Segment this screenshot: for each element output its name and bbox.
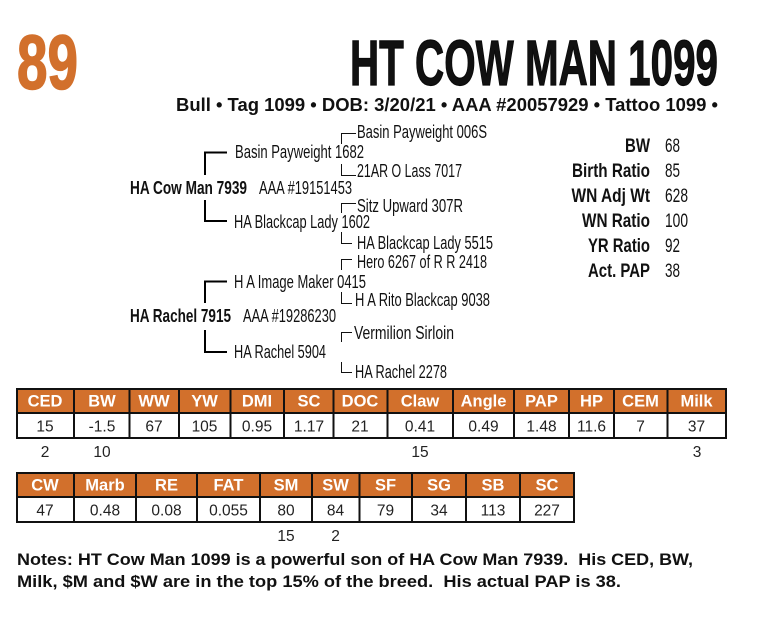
table 1 percentile ranks: 10 xyxy=(93,444,111,461)
table 1 values: 0.41 xyxy=(405,418,435,436)
table 2 values xyxy=(36,502,560,520)
table 1 headers: Milk xyxy=(680,392,713,410)
table 2 values: 47 xyxy=(36,502,54,520)
table 2 values: 0.055 xyxy=(209,502,248,520)
table 1 headers: YW xyxy=(191,392,218,410)
table 1 values: 37 xyxy=(688,418,705,436)
table 2 headers: RE xyxy=(155,476,178,494)
table 2 percentile ranks: 15 xyxy=(277,528,295,545)
table 2 values: 80 xyxy=(277,502,295,520)
sire side of pedigree: HA Blackcap Lady 5515 xyxy=(357,233,493,253)
table 1 values: 1.48 xyxy=(526,418,557,436)
table 2 percentile ranks xyxy=(277,528,340,545)
sire side of pedigree: AAA #19151453 xyxy=(259,178,352,198)
table 2 headers xyxy=(31,476,559,494)
table 1 headers: SC xyxy=(298,392,321,410)
table 1 percentile ranks: 2 xyxy=(41,444,49,461)
table 2 values: 34 xyxy=(430,502,448,520)
table 2 headers: SW xyxy=(322,476,349,494)
table 1 percentile ranks: 3 xyxy=(693,444,701,461)
pedigree connector lines xyxy=(205,134,356,372)
notes: Notes: HT Cow Man 1099 is a powerful son of HA Cow Man 7939. His CED, BW, xyxy=(17,550,693,569)
table 2 headers: FAT xyxy=(214,476,243,494)
dam side of pedigree: HA Rachel 7915 xyxy=(130,306,231,326)
dam side of pedigree: HA Rachel 2278 xyxy=(355,362,447,382)
dam side of pedigree xyxy=(130,252,490,382)
table 2 values: 227 xyxy=(534,502,560,520)
table 1 values xyxy=(36,418,705,436)
table 2 values: 113 xyxy=(481,502,505,520)
table 1 values: 7 xyxy=(636,418,645,436)
sire side of pedigree: HA Cow Man 7939 xyxy=(130,178,247,198)
table 1 headers: Claw xyxy=(401,392,439,410)
table 1 headers: CED xyxy=(28,392,62,410)
performance stats: WN Adj Wt xyxy=(572,186,651,207)
table 2 headers: SB xyxy=(482,476,505,494)
table 1 values: 21 xyxy=(351,418,369,436)
table 1 values: 15 xyxy=(36,418,54,436)
sire side of pedigree: HA Blackcap Lady 1602 xyxy=(234,212,370,232)
table 1 headers: DOC xyxy=(342,392,378,410)
performance stats: YR Ratio xyxy=(588,236,650,257)
performance stats: Birth Ratio xyxy=(572,161,650,182)
table 1 headers: PAP xyxy=(525,392,558,410)
table 2 values: 84 xyxy=(327,502,344,520)
performance stats: 38 xyxy=(665,261,680,282)
table 2 headers: SC xyxy=(536,476,559,494)
sire side of pedigree: Basin Payweight 1682 xyxy=(235,142,364,162)
performance stats xyxy=(572,136,688,282)
table 1 values: 0.49 xyxy=(468,418,499,436)
sire side of pedigree: 21AR O Lass 7017 xyxy=(357,161,462,181)
table 1 headers xyxy=(28,392,713,410)
table 1 headers: HP xyxy=(580,392,603,410)
EPD table 2 xyxy=(16,472,574,522)
subtitle: registration details: Bull • Tag 1099 • DOB: 3/20/21 • AAA #20057929 • Tattoo 1099 • xyxy=(176,95,718,115)
table 1 headers: WW xyxy=(138,392,170,410)
table 2 percentile ranks: 2 xyxy=(331,528,340,545)
dam side of pedigree: Hero 6267 of R R 2418 xyxy=(357,252,487,272)
sire side of pedigree: Sitz Upward 307R xyxy=(357,196,463,216)
performance stats: 68 xyxy=(665,136,680,157)
table 2 headers: Marb xyxy=(85,476,125,494)
pedigree xyxy=(130,122,493,382)
lot number: 89 xyxy=(17,20,78,106)
performance stats: 100 xyxy=(665,211,688,232)
table 2 values: 79 xyxy=(377,502,394,520)
EPD table 1 xyxy=(16,388,727,438)
sire side of pedigree xyxy=(130,122,493,253)
table 1 headers: CEM xyxy=(622,392,659,410)
table 2 headers: SG xyxy=(427,476,451,494)
performance stats: 92 xyxy=(665,236,680,257)
table 1 values: 67 xyxy=(145,418,163,436)
performance stats: Act. PAP xyxy=(588,261,650,282)
table 1 values: -1.5 xyxy=(89,418,115,436)
dam side of pedigree: AAA #19286230 xyxy=(243,306,336,326)
table 1 values: 1.17 xyxy=(294,418,324,436)
performance stats: BW xyxy=(625,136,650,157)
table 1 percentile ranks: 15 xyxy=(411,444,429,461)
dam side of pedigree: Vermilion Sirloin xyxy=(354,323,454,343)
dam side of pedigree: HA Rachel 5904 xyxy=(234,342,326,362)
notes: Milk, $M and $W are in the top 15% of the breed. His actual PAP is 38. xyxy=(17,572,621,591)
performance stats: 628 xyxy=(665,186,688,207)
table 1 percentile ranks xyxy=(41,444,701,461)
dam side of pedigree: H A Image Maker 0415 xyxy=(234,272,366,292)
table 1 values: 0.95 xyxy=(242,418,272,436)
table 2 values: 0.48 xyxy=(90,502,120,520)
sire side of pedigree: Basin Payweight 006S xyxy=(357,122,487,142)
table 2 values: 0.08 xyxy=(151,502,182,520)
notes xyxy=(17,550,693,591)
table 1 headers: Angle xyxy=(461,392,506,410)
dam side of pedigree: H A Rito Blackcap 9038 xyxy=(355,290,490,310)
table 1 headers: DMI xyxy=(242,392,272,410)
table 2 headers: CW xyxy=(31,476,59,494)
table 1 values: 11.6 xyxy=(577,418,606,436)
table 1 headers: BW xyxy=(88,392,116,410)
table 1 values: 105 xyxy=(192,418,217,436)
table 2 headers: SF xyxy=(375,476,396,494)
table 2 headers: SM xyxy=(274,476,298,494)
performance stats: WN Ratio xyxy=(582,211,650,232)
performance stats: 85 xyxy=(665,161,680,182)
